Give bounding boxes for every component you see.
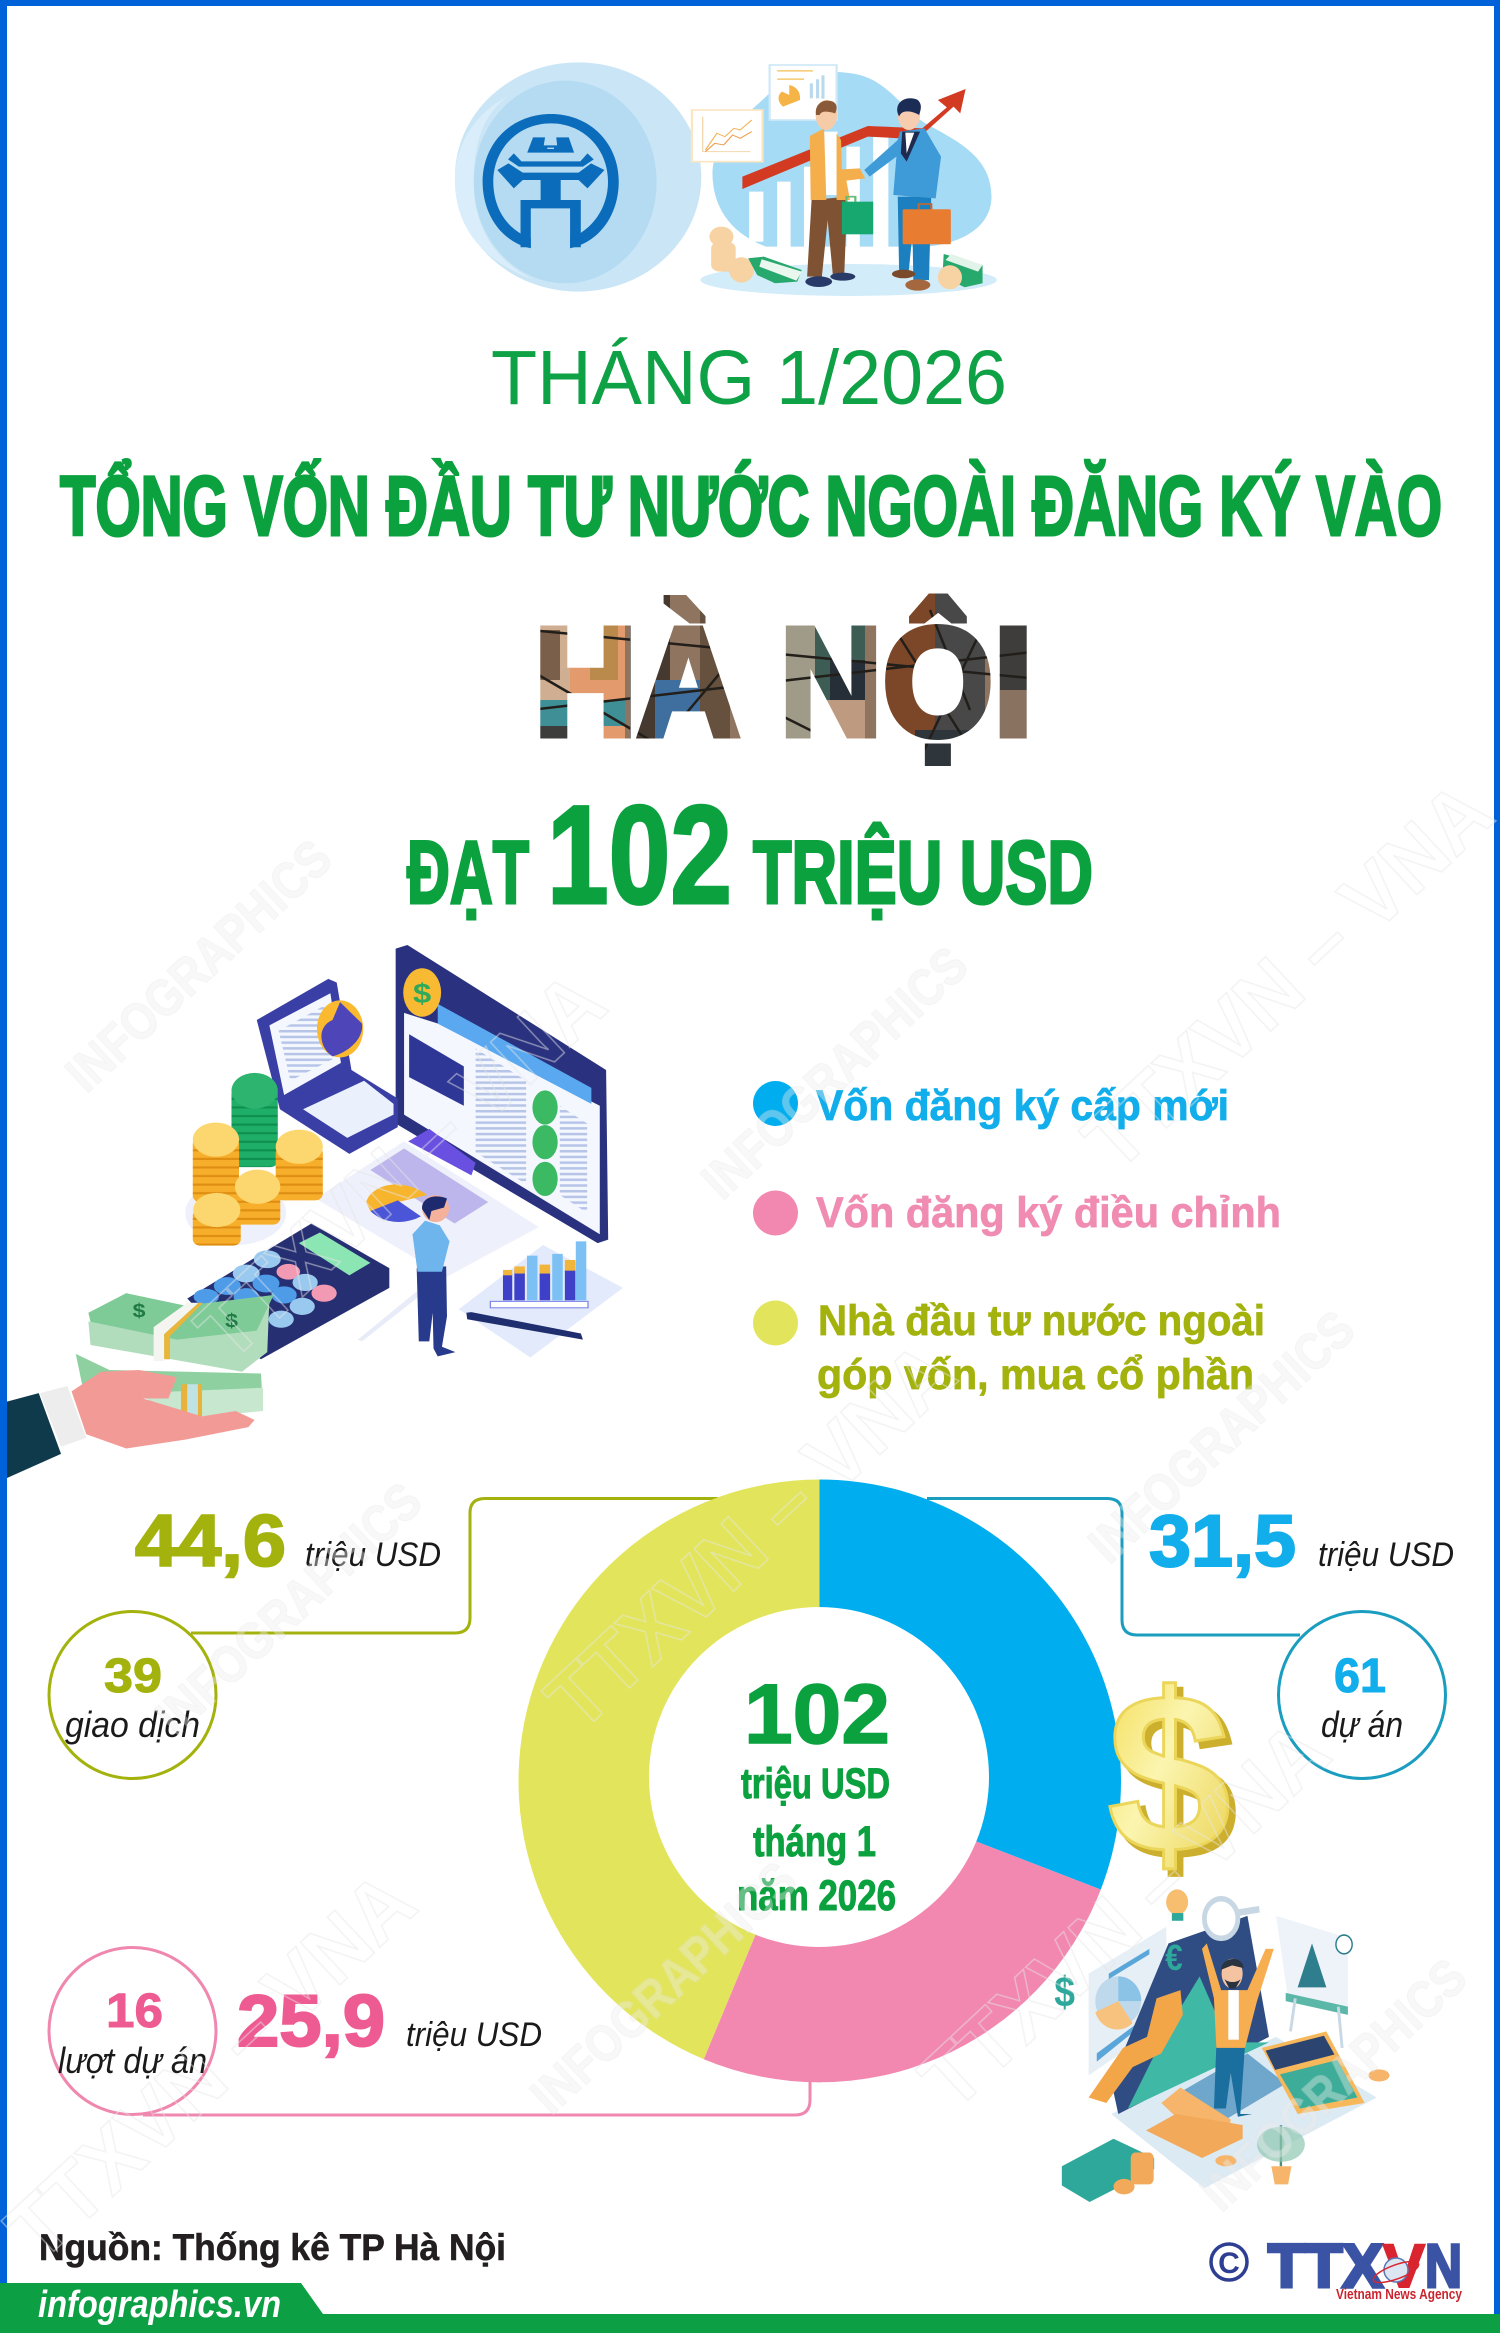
teal cash and coins: [1062, 2139, 1154, 2202]
legend: foreign investors contribution: Nhà đầu tư nước ngoài: [818, 1297, 1265, 1345]
coin stacks: [185, 1073, 323, 1246]
logo: TTXVN: TTX: [1268, 2232, 1383, 2300]
illustration: finance dashboard and cash in hand: [5, 945, 623, 1479]
copyright symbol: C: [1218, 2247, 1240, 2280]
laptop base: [1111, 2037, 1377, 2188]
red growth arrow: [742, 89, 966, 189]
watermarks: TTXVN outlined: TTXVN – VNA: [902, 1703, 1347, 2126]
left document with pie: [1089, 1927, 1169, 2075]
logo: TTXVN: V: [1383, 2232, 1425, 2300]
center total: 102: [744, 1667, 890, 1761]
footer website: infographics.vn: [38, 2284, 281, 2326]
man right: [864, 98, 941, 291]
ground shadow: [700, 264, 997, 296]
flip chart: [1276, 1916, 1352, 2048]
watermarks: INFOGRAPHICS: INFOGRAPHICS: [145, 1472, 433, 1746]
callout circle: 39 transactions: [49, 1612, 216, 1778]
bulb and magnifier: [1166, 1889, 1259, 1938]
bars: [749, 137, 888, 253]
icon: gold dollar sign: $: [1107, 1647, 1231, 1901]
watermarks: INFOGRAPHICS: INFOGRAPHICS: [1078, 1300, 1366, 1574]
legend: [753, 1081, 1281, 1399]
segment: adjusted 25.9: [704, 1781, 1101, 2082]
watermarks: INFOGRAPHICS: [55, 829, 1478, 2222]
logo: TTXVN: N: [1425, 2232, 1462, 2300]
callout: 25,9 million USD: triệu USD: [406, 2016, 542, 2054]
footer bar: [0, 2283, 1500, 2333]
pen: [466, 1312, 583, 1340]
plant: [1257, 2125, 1305, 2184]
connector: blue: [927, 1498, 1300, 1635]
callout: 44,6 million USD: triệu USD: [305, 1536, 441, 1574]
segment: foreign investors 44.6: [519, 1480, 820, 2059]
callout circle: 16 project turns: 16: [106, 1985, 163, 2038]
donut hole: [649, 1607, 989, 1947]
monitor: [396, 945, 608, 1243]
heading: reached 102 million USD: 102: [547, 776, 732, 933]
illustration: investor on laptop with charts: [1054, 1889, 1389, 2202]
center total: [737, 1667, 896, 1920]
cash stacks: $: [133, 1300, 146, 1322]
legend: adjusted capital: Vốn đăng ký điều chỉnh: [816, 1189, 1281, 1237]
hero illustration: Hanoi logo and handshake: [455, 62, 997, 296]
laptop: [257, 979, 398, 1154]
callout: 44,6 million USD: [135, 1501, 441, 1582]
watermarks: TTXVN outlined: TTXVN – VNA: [528, 1324, 973, 1747]
monitor: $: [413, 978, 431, 1009]
heading: month: THÁNG 1/2026: [491, 335, 1007, 421]
Hanoi logo disc: [455, 62, 701, 292]
cash stacks: $: [225, 1310, 238, 1332]
callout: 44,6 million USD: 44,6: [135, 1501, 286, 1582]
callout circle: 61 projects: 61: [1334, 1650, 1386, 1703]
watermarks: INFOGRAPHICS: INFOGRAPHICS: [691, 936, 979, 1210]
copyright symbol: [1211, 2244, 1247, 2280]
hand with cuff: [5, 1370, 255, 1479]
callout: 31,5 million USD: 31,5: [1149, 1501, 1296, 1582]
callout circle: 39 transactions: giao dịch: [65, 1704, 200, 1745]
handshake illustration background blob: [712, 72, 991, 247]
chart card top: [770, 65, 837, 120]
gold bars: [1146, 2069, 1389, 2166]
watermarks: INFOGRAPHICS: INFOGRAPHICS: [55, 829, 343, 1103]
center total: tháng 1: [753, 1818, 876, 1866]
watermarks: TTXVN outlined: [0, 764, 1500, 2277]
callout: 31,5 million USD: [1149, 1501, 1454, 1582]
calculator: [187, 1224, 389, 1359]
callout circle: 39 transactions: 39: [104, 1650, 162, 1703]
logo: TTXVN: [1268, 2232, 1463, 2303]
standing man: [412, 1195, 455, 1356]
legend: new registered capital: Vốn đăng ký cấp mới: [816, 1082, 1229, 1130]
man with raised arms: [1202, 1943, 1274, 2117]
watermarks: TTXVN outlined: TTXVN – VNA: [0, 1854, 433, 2277]
callout circle: 16 project turns: lượt dự án: [58, 2040, 207, 2081]
source note: Nguồn: Thống kê TP Hà Nội: [39, 2227, 506, 2268]
keyboard: [1180, 2053, 1286, 2122]
heading: Hanoi photo-filled text: HÀ NỘI: [534, 596, 1033, 768]
legend: foreign investors contribution: [753, 1297, 1265, 1399]
laptop screen with mountain chart: [1111, 1916, 1269, 2114]
heading: reached 102 million USD: [407, 776, 1093, 933]
coins and money: [709, 227, 983, 289]
bags: [842, 197, 951, 244]
callout: 25,9 million USD: 25,9: [237, 1981, 385, 2062]
callout circle: 16 project turns: [49, 1948, 216, 2114]
watermarks: INFOGRAPHICS: INFOGRAPHICS: [520, 1851, 808, 2125]
watermarks: TTXVN outlined: TTXVN – VNA: [178, 954, 623, 1377]
heading: reached 102 million USD: TRIỆU USD: [753, 822, 1093, 922]
cash stacks: [76, 1293, 274, 1420]
calculator: [1262, 2031, 1365, 2114]
currency symbols: €: [1165, 1938, 1183, 1978]
heading: reached 102 million USD: ĐẠT: [407, 822, 529, 922]
center total: năm 2026: [737, 1872, 896, 1920]
center total: triệu USD: [741, 1760, 890, 1808]
donut chart: [519, 1480, 1121, 2082]
orange arrow: [1089, 1990, 1183, 2103]
pie chart on desk: [366, 1184, 427, 1222]
chart card left: [692, 110, 762, 162]
callout circle: 61 projects: dự án: [1321, 1704, 1403, 1745]
logo: TTXVN: Vietnam News Agency: [1336, 2286, 1463, 2303]
callout: 25,9 million USD: [237, 1981, 542, 2062]
icon: gold dollar sign: $: [1113, 1653, 1237, 1907]
currency symbols: $: [1054, 1968, 1075, 2016]
connector: pink: [143, 2080, 810, 2115]
segment: new 31.5: [820, 1480, 1121, 1890]
legend: foreign investors contribution: góp vốn, mua cổ phần: [817, 1351, 1254, 1399]
currency symbols: [1054, 1938, 1183, 2016]
small bar chart: [490, 1241, 588, 1308]
callout circle: 61 projects: [1278, 1612, 1446, 1778]
man left: [805, 100, 865, 287]
documents under monitor: [316, 1141, 623, 1357]
callout: 31,5 million USD: triệu USD: [1318, 1536, 1454, 1574]
connector: yellow: [191, 1498, 718, 1633]
